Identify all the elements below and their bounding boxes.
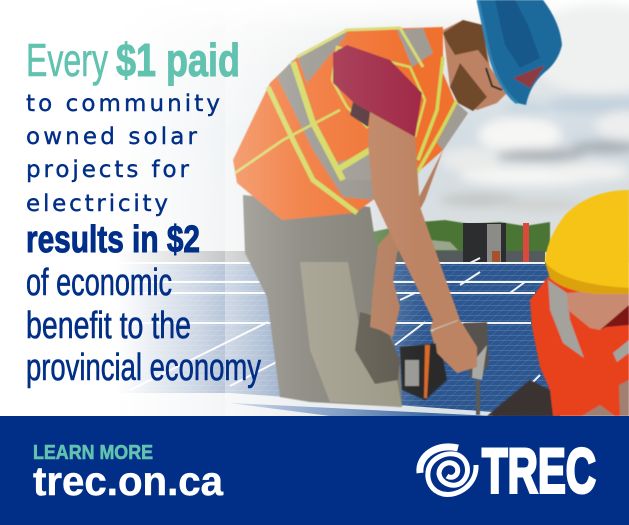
grey strap [548,280,629,362]
photo: rooftop solar workers [0,0,629,416]
solar panels [0,258,560,416]
text: of economic benefit to the provincial economy: benefit to the [26,305,191,347]
text: to community owned solar projects for electricity: projects for [26,157,190,183]
headline: Every $1 paid: $1 paid [116,34,240,86]
icon: swirl [420,447,476,494]
hand on drill [434,320,477,373]
footer band [0,416,629,525]
text: to community owned solar projects for electricity [26,91,220,217]
neck and face [443,20,507,110]
worker with yellow hard hat [487,190,629,416]
website url: trec.on.ca [33,458,224,504]
drill [400,322,489,415]
safety vest [233,27,468,220]
yellow hard hat [545,190,629,294]
roof parapet [0,251,545,262]
grey reflective bands [277,60,373,200]
TREC logo [420,436,596,506]
headline: Every $1 paid: Every [26,34,108,86]
tree line [372,220,550,252]
rear arm [370,150,443,337]
collar [600,305,629,330]
shirt shadow [350,102,370,127]
worker with blue hard hat [233,0,562,415]
emphasis: results in $2: results in $2 [26,219,200,261]
text: of economic benefit to the provincial economy: provincial economy [26,347,261,389]
yellow reflective stripes [268,87,357,213]
headline: Every $1 paid [26,34,240,86]
safety cone [523,223,529,263]
text: to community owned solar projects for electricity: owned solar [26,124,198,150]
text: to community owned solar projects for electricity: to community [26,91,220,117]
rooftop unit [463,223,506,262]
text: to community owned solar projects for electricity: electricity [26,191,168,217]
hand [582,380,629,416]
glasses [486,68,502,90]
background fade to white [0,0,430,416]
orange jacket [530,277,629,416]
beard and hair [443,20,488,111]
face [567,287,629,330]
front arm [368,112,477,373]
call to action: learn more: LEARN MORE [33,442,153,464]
dark sleeve [487,380,553,416]
text: of economic benefit to the provincial economy: of economic [26,262,172,304]
blue hard hat [478,0,562,105]
light fade over worker [225,0,420,416]
red shirt [333,45,422,137]
sky with clouds [0,0,629,262]
text: of economic benefit to the provincial economy [26,262,261,389]
hard hat shade [545,262,629,294]
bracelet [431,321,458,331]
trousers [243,195,402,407]
